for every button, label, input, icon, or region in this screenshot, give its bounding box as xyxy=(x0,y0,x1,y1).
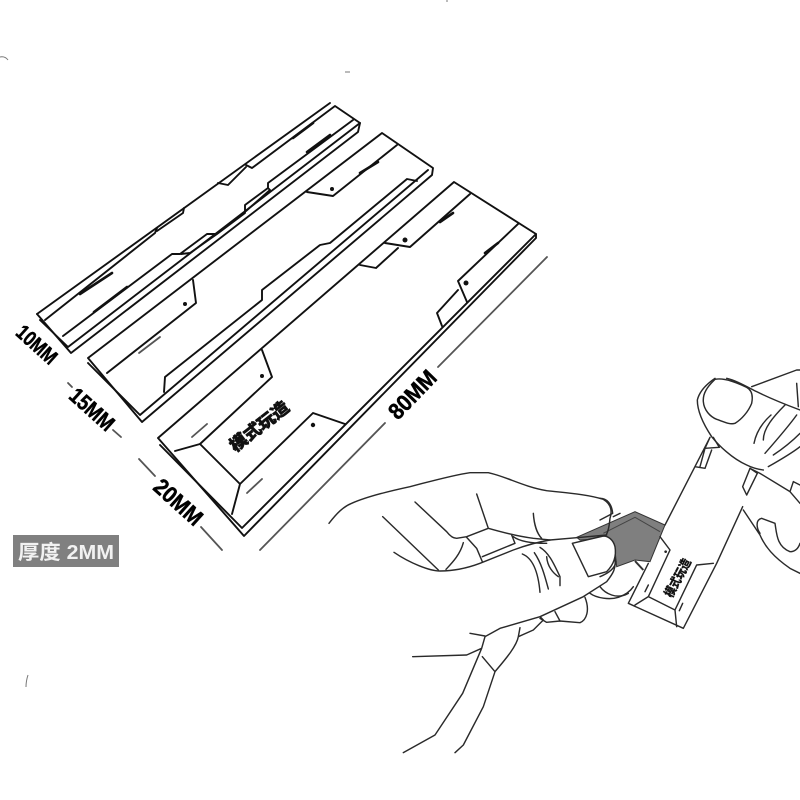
dimension label: 15MM: 15MM xyxy=(64,383,120,436)
dimension label: 80MM xyxy=(260,257,547,550)
dimension label: 20MM xyxy=(139,459,222,550)
thumb xyxy=(703,379,752,424)
dimension label: 80MM: 80MM xyxy=(383,365,442,424)
tool body xyxy=(665,437,719,525)
grey sanded block xyxy=(577,512,665,567)
strip: 15mm wide ruler xyxy=(88,133,433,422)
scraper tool and right hand xyxy=(577,370,800,628)
dimension label: 20MM: 20MM xyxy=(148,473,208,531)
thumbnail xyxy=(572,536,615,577)
left hand fingertips xyxy=(600,498,628,596)
strip: 20mm wide ruler xyxy=(158,182,536,536)
tool logo: 模式玩造 xyxy=(659,554,695,600)
thickness badge xyxy=(13,535,119,567)
right hand fingers xyxy=(743,468,800,573)
hand: left hand holding the tool xyxy=(329,473,633,753)
dimension label: 10MM: 10MM xyxy=(11,321,62,369)
strip: 10mm wide ruler xyxy=(37,103,360,353)
brand logo on ruler: 模式玩造 xyxy=(223,394,294,456)
thickness badge: 厚度 2MM xyxy=(18,541,114,564)
